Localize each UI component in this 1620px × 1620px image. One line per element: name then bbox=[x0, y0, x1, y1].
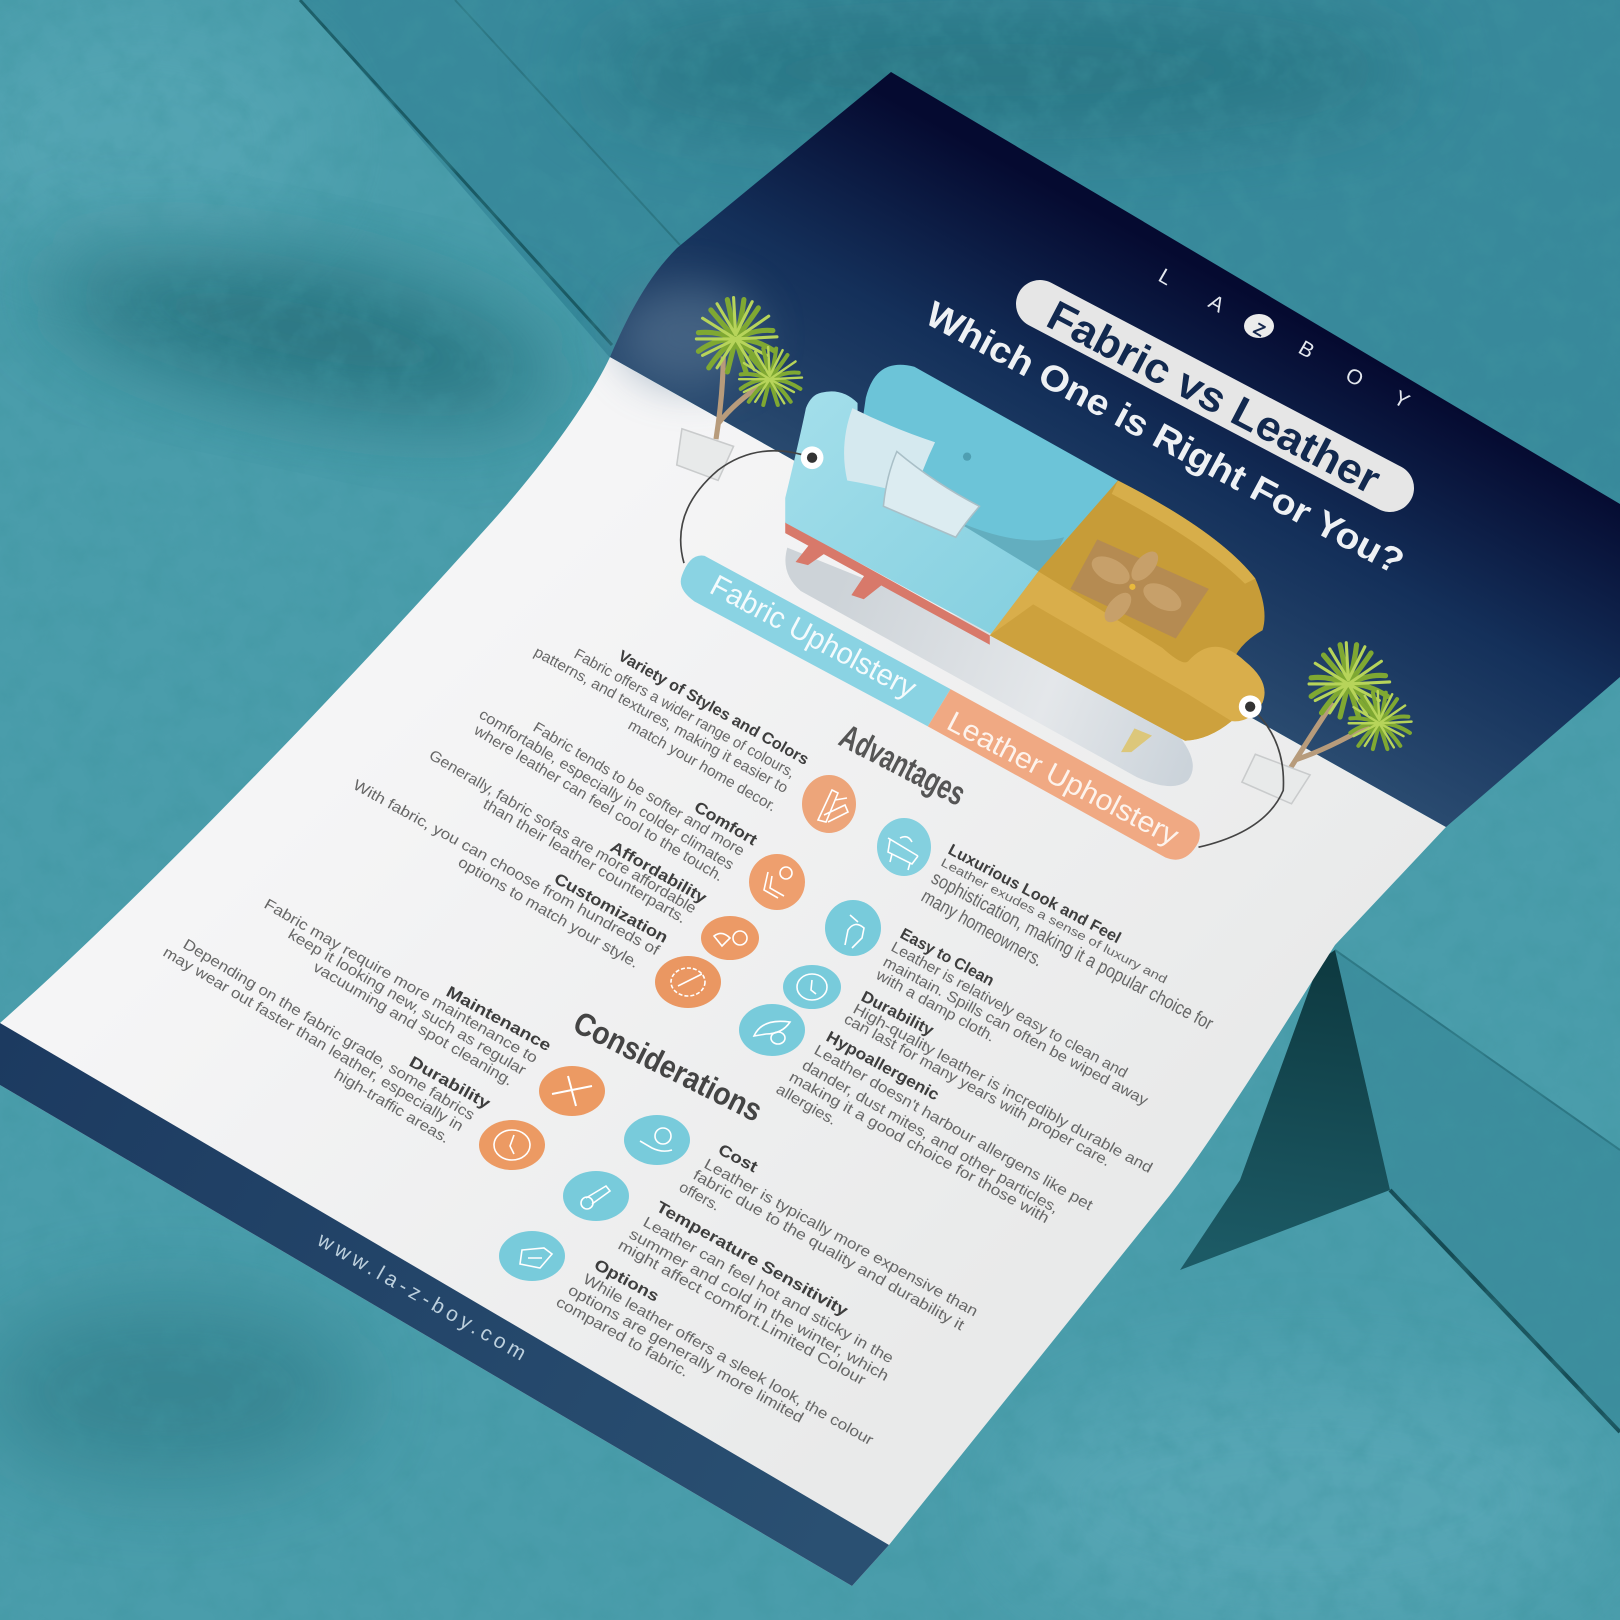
title pill: Fabric vs Leather bbox=[1040, 291, 1388, 503]
fabric considerations text: Fabric may require more maintenance to bbox=[261, 896, 541, 1067]
fabric advantages text: Generally, fabric sofas are more affordable bbox=[426, 747, 699, 917]
fabric advantages text bbox=[350, 644, 811, 972]
fabric considerations text: high-traffic areas. bbox=[331, 1066, 452, 1147]
fabric advantages text: Variety of Styles and Colors bbox=[615, 648, 811, 769]
fabric advantages text: patterns, and textures, making it easier to bbox=[531, 644, 791, 797]
soft glow on the navy header bbox=[620, 285, 760, 385]
fabric advantages text: Comfort bbox=[691, 799, 760, 850]
brand logo: L bbox=[1154, 264, 1176, 290]
icon: easy to clean hand bbox=[825, 900, 881, 956]
icon: cost hand with coin bbox=[624, 1115, 690, 1165]
leather advantages text: Leather exudes a sense of luxury and bbox=[939, 855, 1170, 987]
header navy band bbox=[610, 72, 1620, 827]
leather considerations text bbox=[553, 1142, 981, 1449]
leather considerations text: might affect comfort.Limited Colour bbox=[615, 1237, 868, 1389]
paper white body bbox=[0, 357, 1446, 1586]
fabric advantages text: Fabric offers a wider range of colours, bbox=[571, 646, 798, 782]
leather considerations text: options are generally more limited bbox=[565, 1282, 806, 1427]
brand logo: B bbox=[1294, 336, 1318, 363]
fabric advantages text: With fabric, you can choose from hundreds of bbox=[350, 777, 663, 960]
yellow seat and arm bbox=[990, 571, 1265, 741]
icon: options swatches bbox=[499, 1231, 565, 1281]
yellow sofa leg bbox=[1121, 728, 1152, 752]
fabric advantages text: match your home decor. bbox=[625, 717, 779, 815]
fabric advantages text: where leather can feel cool to the touch. bbox=[470, 721, 726, 885]
footer url: www.la-z-boy.com bbox=[313, 1228, 530, 1365]
plant left bbox=[677, 298, 802, 480]
leather considerations text: Temperature Sensitivity bbox=[653, 1199, 851, 1320]
leather considerations text: Leather is typically more expensive than bbox=[701, 1156, 981, 1320]
fabric considerations text: Depending on the fabric grade, some fabrics bbox=[180, 936, 478, 1124]
floor shadow bbox=[785, 548, 1193, 786]
brand logo: A bbox=[1204, 290, 1228, 317]
leather advantages text: with a damp cloth. bbox=[872, 966, 998, 1046]
leather considerations text: fabric due to the quality and durability it bbox=[690, 1167, 968, 1335]
leather advantages text: Leather is relatively easy to clean and bbox=[888, 939, 1130, 1082]
shadow cast by the paper bbox=[1180, 950, 1390, 1270]
icon: fabric durability clock bbox=[479, 1120, 545, 1170]
leather advantages text: allergies. bbox=[773, 1081, 840, 1129]
leather advantages text: Durability bbox=[858, 988, 936, 1040]
fabric advantages text: Affordability bbox=[607, 839, 709, 907]
leather considerations text: compared to fabric. bbox=[553, 1294, 692, 1381]
fabric considerations text: Durability bbox=[406, 1054, 493, 1113]
icon: maintenance tools bbox=[539, 1066, 605, 1116]
leather advantages text: sophistication, making it a popular choice for bbox=[928, 868, 1217, 1035]
leather advantages text: Leather doesn't harbour allergens like pet bbox=[811, 1042, 1096, 1215]
fabric advantages text: Customization bbox=[551, 871, 670, 947]
icon: comfort bbox=[749, 854, 805, 910]
leather advantages text: Hypoallergenic bbox=[823, 1029, 942, 1104]
fabric considerations text: may wear out faster than leather, especially in bbox=[160, 944, 466, 1135]
leather advantages text: maintain. Spills can often be wiped away bbox=[880, 954, 1151, 1110]
heading: considerations: Considerations bbox=[568, 1004, 768, 1128]
sofa illustration bbox=[785, 365, 1265, 786]
leather advantages text: can last for many years with proper care. bbox=[841, 1011, 1113, 1170]
blue arm and seat bbox=[785, 391, 1038, 634]
fabric considerations text: vacuuming and spot cleaning. bbox=[310, 959, 516, 1090]
fabric considerations text: keep it looking new, such as regular bbox=[285, 926, 529, 1079]
heading: advantages: Advantages bbox=[833, 717, 972, 813]
fabric considerations text bbox=[160, 896, 554, 1147]
icon: hypoallergenic leaf bbox=[739, 1004, 805, 1056]
icon: styles swatches bbox=[802, 775, 856, 833]
brand logo: O bbox=[1342, 363, 1367, 392]
subtitle: Which One is Right For You? bbox=[919, 293, 1411, 582]
sofa frame and legs bbox=[785, 522, 990, 645]
icon: customization gear bbox=[655, 956, 721, 1008]
leather advantages text: making it a good choice for those with bbox=[786, 1069, 1052, 1227]
connector line: leather bbox=[1199, 695, 1283, 847]
band: fabric upholstery: Fabric Upholstery bbox=[705, 569, 922, 705]
icon: luxury bathtub sofa bbox=[877, 818, 931, 876]
leather advantages text: Easy to Clean bbox=[897, 926, 997, 990]
fabric advantages text: options to match your style. bbox=[455, 854, 642, 972]
brand logo bbox=[1154, 264, 1413, 413]
leather considerations text: offers. bbox=[676, 1179, 723, 1215]
fabric advantages text: Fabric tends to be softer and more bbox=[530, 719, 747, 860]
icon: durability clock bbox=[783, 965, 841, 1009]
brand logo: Y bbox=[1390, 386, 1413, 413]
leather considerations text: Leather can feel hot and sticky in the bbox=[640, 1214, 896, 1367]
band: leather upholstery: Leather Upholstery bbox=[942, 706, 1184, 853]
blue pillows bbox=[844, 408, 935, 496]
brown pillow bbox=[1070, 539, 1209, 639]
leather considerations text: summer and cold in the winter, which bbox=[626, 1226, 892, 1385]
fabric considerations text: Maintenance bbox=[443, 984, 554, 1055]
leather advantages text: High-quality leather is incredibly durable and bbox=[850, 1001, 1155, 1177]
footer navy band bbox=[0, 1023, 889, 1586]
blue back cushion bbox=[858, 365, 1118, 591]
icon: temperature thermometer bbox=[563, 1171, 629, 1221]
leather considerations text: While leather offers a sleek look, the colour bbox=[580, 1271, 876, 1449]
leather advantages text: dander, dust mites, and other particles, bbox=[799, 1057, 1062, 1217]
right block faces bbox=[1335, 950, 1620, 1430]
connector line: fabric bbox=[681, 446, 823, 563]
fabric advantages text: comfortable, especially in colder climates bbox=[476, 706, 737, 874]
leather considerations text: Options bbox=[591, 1257, 662, 1306]
icon: affordability bbox=[701, 916, 759, 960]
plant right bbox=[1242, 643, 1412, 804]
leather advantages text bbox=[773, 842, 1217, 1227]
leather advantages text: Luxurious Look and Feel bbox=[945, 842, 1124, 947]
brand logo: Z bbox=[1250, 319, 1268, 341]
fabric advantages text: than their leather counterparts. bbox=[480, 796, 689, 927]
band: fabric upholstery bbox=[681, 555, 951, 726]
leather advantages text: many homeowners. bbox=[918, 886, 1046, 971]
leather considerations text: Cost bbox=[715, 1142, 761, 1177]
yellow back bbox=[1038, 480, 1265, 692]
